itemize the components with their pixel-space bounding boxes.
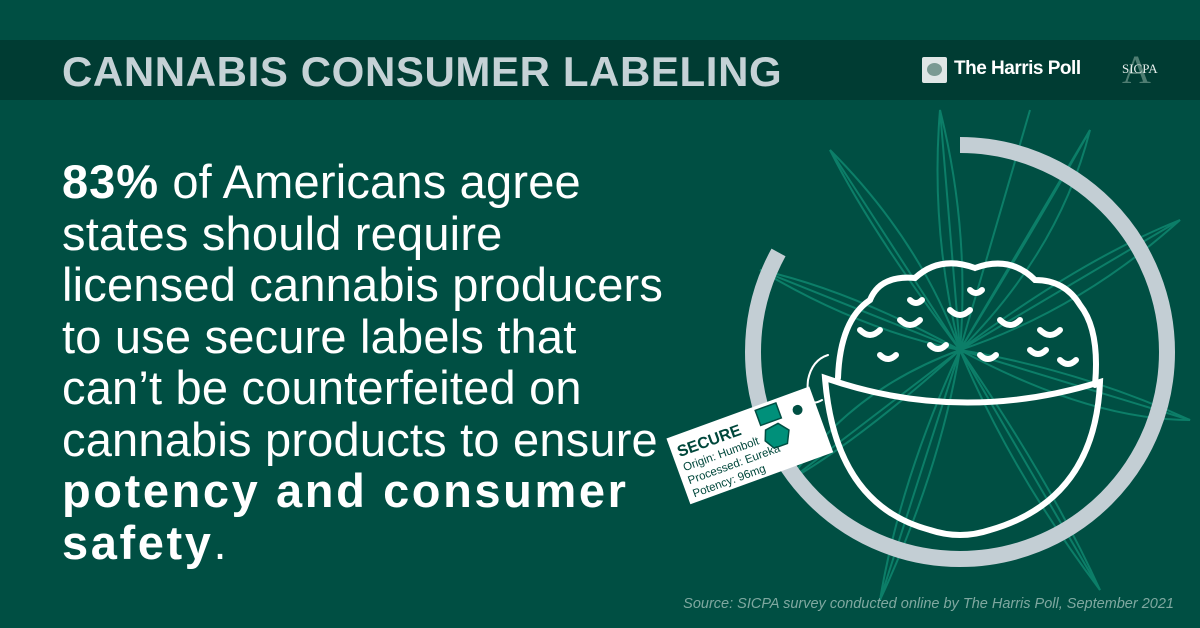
callout: security tag: SECURE: [675, 422, 744, 461]
callout: security tag: Origin: Humbolt: [682, 435, 762, 474]
callout: security tag: [666, 386, 833, 504]
main statement text: to use secure labels that: [62, 310, 576, 362]
callout: security tag: Potency: 96mg: [691, 463, 767, 500]
logo: SICPA: A: [1122, 47, 1151, 92]
main statement text: [62, 155, 663, 569]
main statement text: cannabis products to ensure: [62, 412, 658, 466]
logo: The Harris Poll: The Harris Poll: [954, 58, 1081, 79]
callout: security tag: Processed: Eureka: [686, 442, 782, 487]
source note: Source: SICPA survey conducted online by The Harris Poll, September 2021: [683, 596, 1174, 612]
main statement text: potency and consumer: [62, 464, 628, 517]
logo: The Harris Poll: [922, 57, 1081, 83]
main statement text: licensed cannabis producers: [62, 258, 663, 311]
title: CANNABIS CONSUMER LABELING: [62, 48, 782, 95]
main statement text: states should require: [62, 206, 503, 260]
main statement text: can’t be counterfeited on: [62, 361, 582, 414]
main statement text: 83% of Americans agree: [62, 155, 581, 208]
header bar: [0, 40, 1200, 100]
logo: SICPA: SICPA: [1122, 61, 1158, 76]
main statement text: safety.: [62, 516, 227, 568]
